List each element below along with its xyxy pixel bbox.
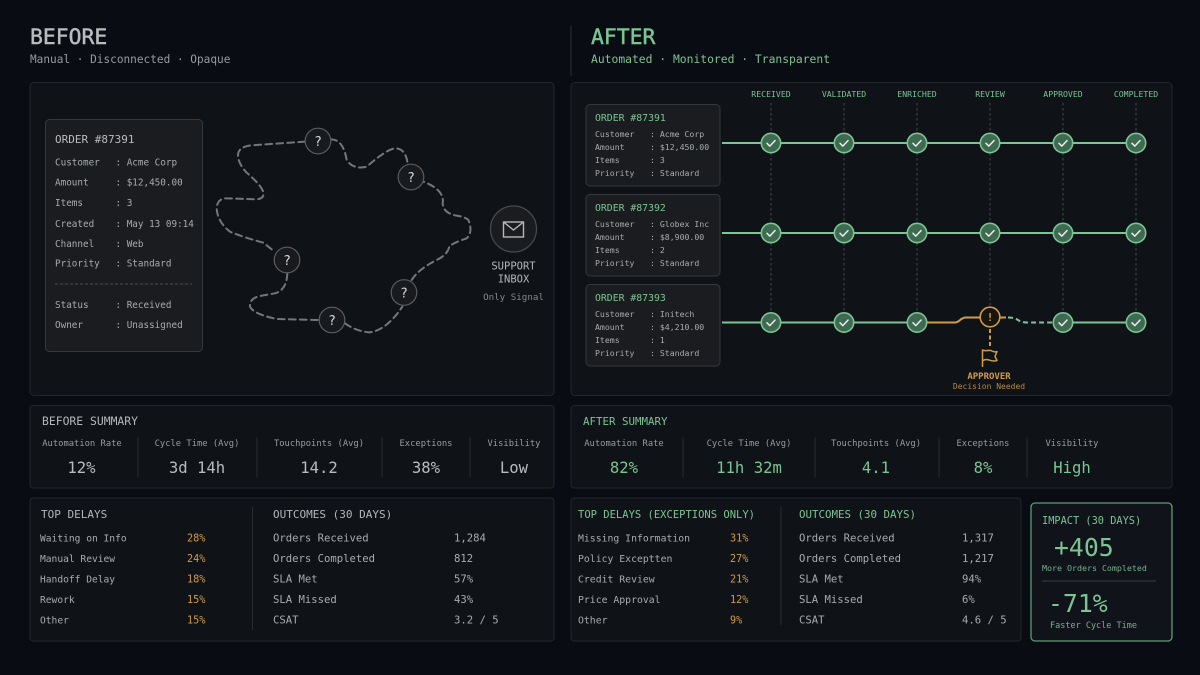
list: outcomes after: OUTCOMES (30 DAYS) [799, 508, 916, 521]
order card: 87391 after [586, 104, 720, 186]
icon: review warning [980, 307, 1000, 327]
order card: 87393 after: Amount [595, 322, 625, 332]
order card: 87391 before: Items [55, 198, 83, 209]
stat: cycle time: 3d 14h [169, 459, 225, 477]
order card: 87391 before: Channel [55, 239, 94, 250]
stat: touchpoints [274, 439, 364, 477]
question nodes: ? [407, 171, 415, 186]
list: top delays: Handoff Delay [40, 574, 115, 586]
stat: touchpoints: 14.2 [300, 459, 338, 477]
stat: cycle time [707, 439, 791, 477]
stat: exceptions [957, 439, 1009, 477]
list: top delays: 18% [187, 574, 205, 586]
stat: cycle time: 11h 32m [716, 459, 782, 477]
list: top delays exceptions only: 12% [730, 595, 748, 606]
list: top delays: 24% [187, 554, 205, 565]
panel: after summary [571, 406, 1172, 488]
list: outcomes: 1,284 [454, 532, 486, 544]
metric: more orders: +405 [1054, 533, 1114, 562]
stat: visibility: High [1053, 459, 1091, 477]
stage headers: VALIDATED [822, 89, 866, 99]
metric: more orders [1042, 533, 1147, 573]
panel: before delays and outcomes [30, 498, 554, 641]
icon: approver flag [982, 350, 997, 367]
order card: 87391 before: : Received [116, 300, 171, 311]
stat: visibility: Visibility [1046, 439, 1098, 449]
list: outcomes: SLA Met [273, 574, 318, 586]
icon: support inbox: SUPPORT [491, 260, 536, 272]
metric: more orders: More Orders Completed [1042, 563, 1147, 573]
stat: touchpoints: Touchpoints (Avg) [274, 439, 364, 449]
list: outcomes after: 94% [962, 574, 982, 586]
timeline row 1 [722, 133, 1146, 153]
list: top delays exceptions only: 21% [730, 574, 748, 586]
approver label [953, 372, 1025, 391]
stat: exceptions [400, 439, 452, 477]
list: top delays exceptions only: Credit Review [578, 574, 655, 586]
list: outcomes [273, 508, 499, 626]
heading: after: Automated · Monitored · Transparent [591, 52, 830, 66]
list: outcomes after [799, 508, 1007, 626]
order card: 87393 after: : Standard [650, 348, 699, 358]
order card: 87391 before: : Standard [116, 258, 171, 270]
list: top delays exceptions only: Missing Information [578, 534, 690, 544]
list: outcomes: Orders Completed [273, 553, 375, 565]
icon: support inbox: Only Signal [483, 292, 544, 303]
order card: 87391 before: Created [55, 219, 94, 230]
order card: 87393 after: Items [595, 335, 620, 345]
order card: 87391 after: Amount [595, 142, 625, 152]
order card: 87392 after [586, 194, 720, 276]
metric: faster cycle [1048, 589, 1137, 631]
order card: 87392 after: Priority [595, 258, 635, 268]
order card: 87393 after: : 1 [650, 335, 665, 345]
order card: 87391 before: : Unassigned [116, 320, 183, 331]
list: top delays exceptions only: TOP DELAYS (EXCEPTIONS ONLY) [578, 509, 755, 521]
list: top delays exceptions only: Other [578, 616, 608, 626]
stat: automation rate: Automation Rate [584, 439, 664, 449]
order card: 87391 after: : 3 [650, 155, 665, 165]
stat: visibility [488, 439, 540, 477]
order card: 87391 after: Customer [595, 129, 635, 139]
question nodes [274, 128, 424, 333]
list: outcomes: Orders Received [273, 532, 369, 544]
list: top delays: 28% [187, 534, 205, 544]
panel: before process [30, 82, 554, 396]
stat: cycle time [155, 439, 239, 477]
list: outcomes after: CSAT [799, 614, 825, 626]
stat: touchpoints: 4.1 [862, 459, 890, 477]
order card: 87391 after: : Acme Corp [650, 129, 704, 139]
question nodes: ? [283, 254, 291, 269]
order card: 87391 before: : Acme Corp [116, 158, 177, 168]
stat: touchpoints [831, 439, 921, 477]
stage headers: ENRICHED [897, 89, 937, 99]
list: top delays: Waiting on Info [40, 534, 127, 544]
order card: 87393 after: Priority [595, 348, 635, 358]
stat: exceptions: 38% [412, 459, 441, 477]
list: outcomes: OUTCOMES (30 DAYS) [273, 508, 392, 521]
list: outcomes after: 1,217 [962, 553, 994, 565]
timeline row 2 [722, 223, 1146, 243]
list: outcomes: 43% [454, 594, 474, 606]
list: top delays: TOP DELAYS [41, 508, 107, 521]
order card: 87393 after: ORDER #87393 [595, 293, 666, 304]
stat: exceptions: Exceptions [400, 439, 452, 449]
list: top delays: Manual Review [40, 554, 115, 565]
heading: after: AFTER [591, 25, 656, 50]
stat: exceptions: 8% [974, 459, 993, 477]
order card: 87391 before: : Web [116, 239, 144, 250]
stat: automation rate [42, 439, 122, 477]
timeline row 3 with exception [722, 313, 1146, 332]
order card: 87392 after: : Standard [650, 258, 699, 268]
panel: after delays and outcomes [571, 498, 1021, 641]
order card: 87391 after: : Standard [650, 168, 699, 178]
order card: 87391 before: ORDER #87391 [55, 133, 134, 146]
list: outcomes: 57% [454, 574, 474, 586]
list: outcomes: 3.2 / 5 [454, 614, 499, 626]
stage headers: REVIEW [975, 89, 1005, 99]
approver label: APPROVER [967, 372, 1011, 382]
order card: 87391 after: Items [595, 155, 620, 165]
list: outcomes after: SLA Missed [799, 594, 863, 606]
stage headers: APPROVED [1043, 89, 1083, 99]
list: top delays: Other [40, 616, 69, 626]
stat: automation rate: 82% [610, 459, 639, 477]
panel: impact [1031, 503, 1172, 641]
heading: before: BEFORE [30, 25, 107, 50]
list: outcomes after: SLA Met [799, 574, 844, 586]
order card: 87391 before: Priority [55, 258, 100, 270]
stage headers: RECEIVED [751, 89, 791, 99]
stat: cycle time: Cycle Time (Avg) [707, 439, 791, 449]
order card: 87391 before: : $12,450.00 [116, 178, 183, 188]
list: top delays: Rework [40, 595, 75, 606]
stat: automation rate: 12% [67, 459, 96, 477]
stat: automation rate: Automation Rate [42, 439, 122, 449]
list: top delays exceptions only: 31% [730, 534, 748, 544]
order card: 87391 before: Amount [55, 178, 89, 188]
list: top delays exceptions only: Price Approval [578, 595, 661, 606]
panel: before summary: BEFORE SUMMARY [42, 414, 138, 428]
list: top delays exceptions only: Policy Exceptten [578, 554, 672, 565]
order card: 87392 after: Customer [595, 219, 635, 229]
list: top delays exceptions only: 27% [730, 554, 748, 565]
heading: before: Manual · Disconnected · Opaque [30, 53, 231, 66]
question nodes: ? [314, 135, 322, 150]
order card: 87393 after: : $4,210.00 [650, 322, 704, 332]
heading: after [591, 25, 830, 66]
list: top delays exceptions only: 9% [730, 616, 742, 626]
order card: 87392 after: : $8,900.00 [650, 232, 704, 242]
list: outcomes after: 1,317 [962, 532, 994, 544]
order card: 87391 before: : 3 [116, 198, 132, 209]
list: top delays: 15% [187, 616, 205, 626]
order card: 87391 before: Owner [55, 320, 83, 331]
panel: after summary: AFTER SUMMARY [583, 415, 668, 428]
metric: faster cycle: -71% [1048, 589, 1108, 618]
stat: touchpoints: Touchpoints (Avg) [831, 439, 921, 449]
stat: visibility [1046, 439, 1098, 477]
stat: automation rate [584, 439, 664, 477]
list: top delays [40, 508, 205, 626]
list: outcomes: CSAT [273, 614, 299, 626]
stage headers: COMPLETED [1114, 89, 1158, 99]
icon: review warning: ! [987, 311, 993, 324]
panel: impact: IMPACT (30 DAYS) [1042, 515, 1141, 527]
list: outcomes after: 6% [962, 594, 975, 606]
order card: 87391 after: Priority [595, 168, 635, 178]
order card: 87391 before: Status [55, 300, 89, 311]
list: top delays: 15% [187, 595, 205, 606]
list: outcomes: SLA Missed [273, 594, 337, 606]
stat: visibility: Low [500, 459, 529, 477]
order card: 87391 before: : May 13 09:14 [116, 219, 194, 230]
metric: faster cycle: Faster Cycle Time [1050, 621, 1137, 631]
order card: 87392 after: Items [595, 245, 620, 255]
question nodes: ? [400, 286, 408, 302]
stat: exceptions: Exceptions [957, 439, 1009, 449]
question nodes: ? [328, 314, 336, 329]
order card: 87393 after [586, 284, 720, 366]
list: top delays exceptions only [578, 509, 755, 626]
order card: 87392 after: Amount [595, 232, 625, 242]
order card: 87391 after: ORDER #87391 [595, 113, 666, 124]
stat: visibility: Visibility [488, 439, 540, 449]
icon: support inbox [483, 206, 544, 303]
stage headers [751, 89, 1158, 99]
order card: 87391 after: : $12,450.00 [650, 142, 709, 152]
list: outcomes after: 4.6 / 5 [962, 614, 1007, 626]
order card: 87392 after: ORDER #87392 [595, 203, 666, 214]
order card: 87391 before [46, 120, 202, 352]
list: outcomes after: Orders Received [799, 532, 895, 544]
order card: 87393 after: Customer [595, 309, 635, 319]
list: outcomes: 812 [454, 553, 473, 565]
approver label: Decision Needed [953, 382, 1025, 391]
stat: cycle time: Cycle Time (Avg) [155, 439, 239, 449]
tangled dashed path [217, 139, 470, 332]
order card: 87393 after: : Initech [650, 309, 694, 319]
heading: before [30, 25, 231, 66]
panel: after process [571, 82, 1172, 396]
order card: 87392 after: : 2 [650, 245, 665, 255]
order card: 87391 before: Customer [55, 158, 100, 168]
panel: before summary [30, 406, 554, 488]
order card: 87392 after: : Globex Inc [650, 219, 709, 229]
list: outcomes after: Orders Completed [799, 553, 901, 565]
icon: support inbox: INBOX [498, 274, 530, 286]
